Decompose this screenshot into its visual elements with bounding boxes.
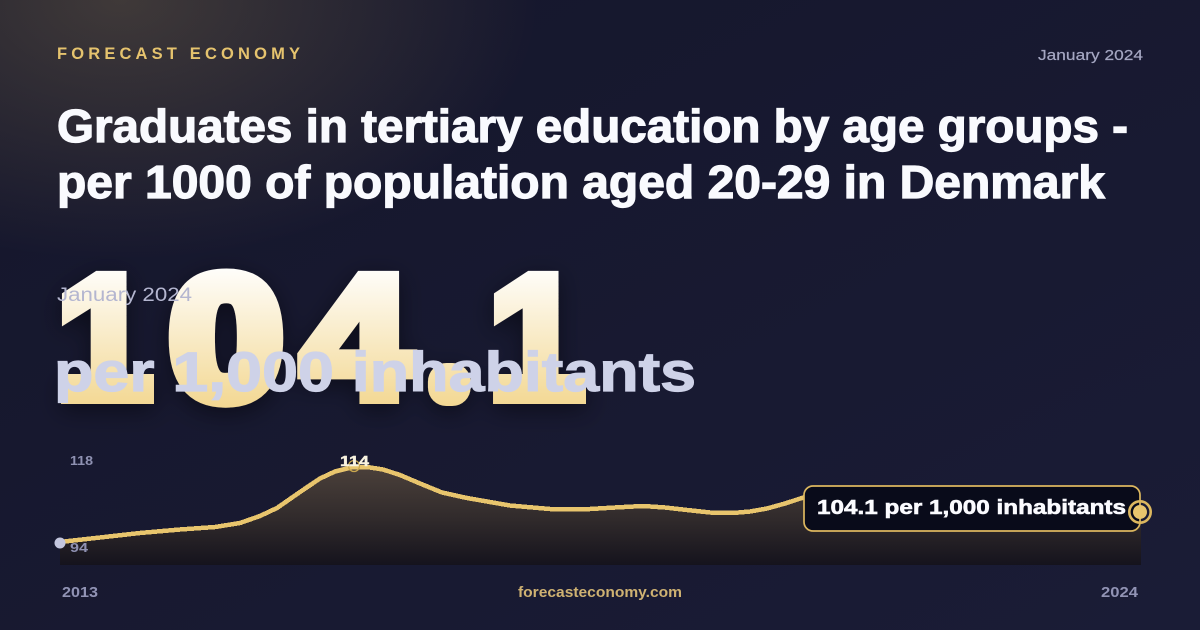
area chart: [54, 460, 1141, 565]
big value: 4: [301, 239, 412, 435]
area fill: [60, 467, 1141, 565]
callout: [804, 486, 1140, 531]
date top right: January 2024: [1038, 47, 1143, 64]
source url: forecasteconomy.com: [518, 585, 682, 601]
axis label min: 94: [70, 540, 89, 555]
trend line: [60, 467, 805, 542]
big value: 0: [170, 240, 282, 435]
axis label max: 118: [70, 453, 93, 468]
peak marker: [348, 460, 360, 472]
big value: [56, 239, 585, 436]
x axis end: 2024: [1101, 585, 1138, 601]
x axis start: 2013: [62, 585, 98, 601]
end point marker: [1129, 501, 1151, 523]
big value: .: [444, 352, 455, 396]
title: Graduates in tertiary education by age groups -: [57, 100, 1128, 152]
big value: 1: [488, 239, 585, 436]
title: [57, 100, 1128, 208]
callout: 104.1 per 1,000 inhabitants: [817, 496, 1126, 519]
title: per 1000 of population aged 20-29 in Denmark: [57, 156, 1105, 208]
unit label: per 1,000 inhabitants: [54, 340, 696, 403]
brand label: FORECAST ECONOMY: [57, 45, 300, 63]
start point: [54, 538, 66, 548]
peak label: 114: [340, 454, 369, 470]
big value: 1: [56, 239, 153, 436]
date subtitle: January 2024: [57, 285, 192, 306]
